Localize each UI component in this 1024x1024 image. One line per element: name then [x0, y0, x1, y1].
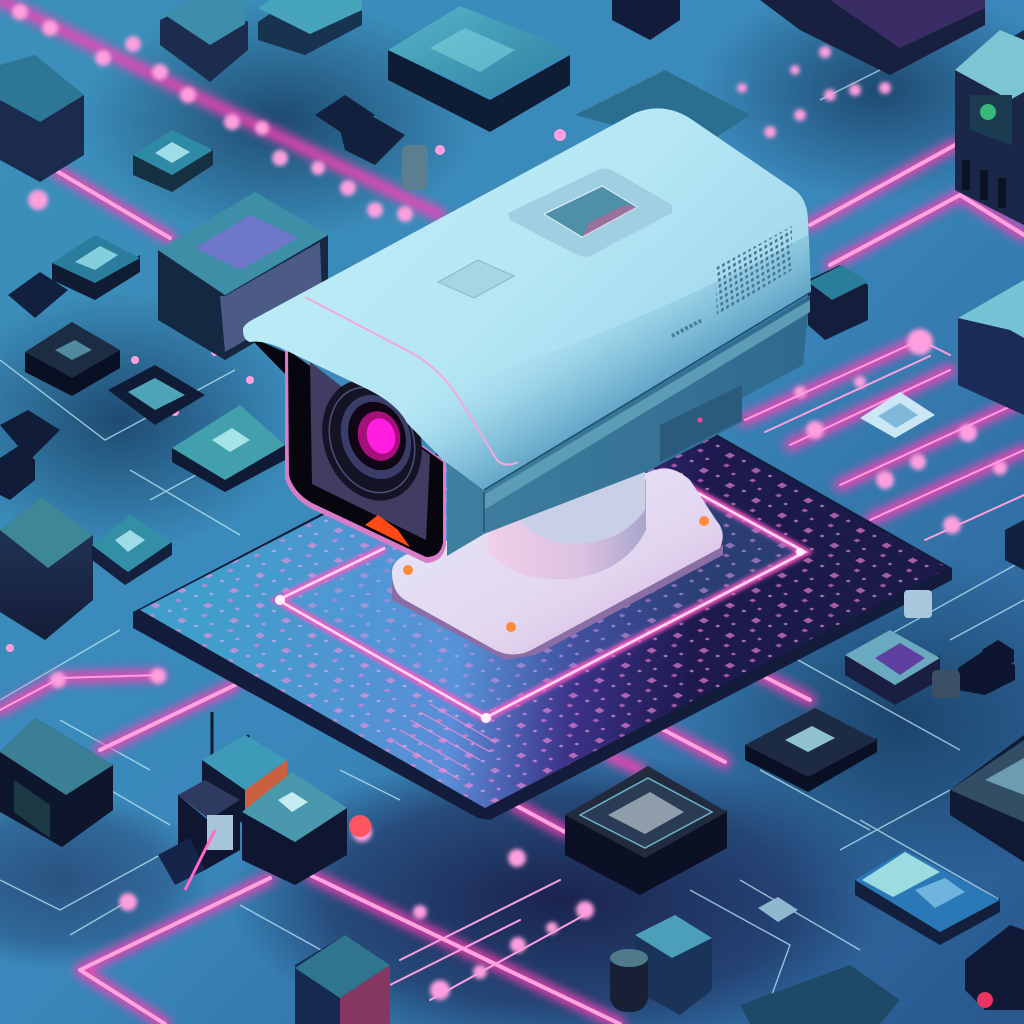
chip top	[160, 0, 248, 82]
socket chip	[108, 365, 205, 425]
lower housing	[447, 295, 810, 556]
dark module top right	[760, 0, 985, 75]
lens	[306, 365, 438, 515]
tower component	[158, 712, 371, 890]
chip behind camera	[575, 70, 750, 148]
lens housing	[285, 348, 446, 563]
blue chip	[855, 850, 1000, 945]
trace detail: thin right-side traces	[0, 340, 1024, 1000]
small chip	[758, 897, 798, 922]
security camera	[243, 108, 811, 660]
pink dot field	[140, 372, 948, 808]
connector	[1005, 520, 1024, 570]
chip block far left	[0, 55, 84, 182]
chip cluster bottom	[610, 915, 712, 1015]
chip right edge	[950, 735, 1024, 862]
module right middle	[958, 280, 1024, 415]
large chip	[388, 6, 570, 132]
teal chip	[172, 405, 285, 492]
board edge	[133, 368, 952, 820]
body main	[243, 108, 811, 490]
base plate	[392, 468, 723, 660]
chip bottom centre	[295, 935, 390, 1024]
hood lower seam	[484, 292, 811, 490]
under hood shadow	[248, 336, 285, 374]
speaker grille	[715, 226, 792, 316]
dark components cluster	[315, 95, 428, 190]
top-left chips	[0, 0, 570, 847]
block bottom left	[0, 718, 113, 847]
light square chip	[860, 392, 935, 438]
glowing inner square: blur	[278, 472, 805, 718]
pink seam on hood	[305, 297, 518, 465]
vent dots	[672, 320, 702, 336]
large black chip	[565, 766, 727, 895]
black chip	[745, 708, 877, 792]
small chip	[904, 590, 932, 618]
glowing inner square: core	[278, 472, 805, 718]
cpu socket	[845, 630, 940, 705]
clean inner square	[280, 440, 805, 718]
dark chip pair	[52, 235, 140, 300]
glowing junction dots	[275, 548, 804, 723]
top-right components	[575, 0, 1024, 438]
circuit board platform	[133, 368, 952, 820]
chip top centre	[258, 0, 362, 55]
capacitors	[932, 640, 1015, 698]
hood front shaded face	[395, 235, 811, 490]
teal chip lower	[92, 515, 172, 585]
bolts	[403, 516, 709, 632]
board top	[140, 372, 948, 808]
dense trace cluster	[385, 704, 496, 780]
bottom-right components	[295, 520, 1024, 1024]
tall module right	[955, 30, 1024, 225]
small chip	[808, 265, 868, 340]
black chip	[25, 322, 120, 396]
memory strip bottom	[740, 965, 900, 1024]
antennas	[212, 712, 248, 780]
dark chips left edge	[0, 410, 60, 500]
chip on tower	[242, 772, 347, 885]
small chip left	[133, 130, 213, 192]
chip top	[612, 0, 680, 40]
block left	[0, 497, 93, 640]
small connector	[8, 272, 68, 318]
module bottom right	[965, 925, 1024, 1010]
small badge	[438, 260, 514, 298]
neck	[488, 470, 646, 579]
memory module	[158, 192, 328, 360]
display pad	[508, 168, 672, 257]
